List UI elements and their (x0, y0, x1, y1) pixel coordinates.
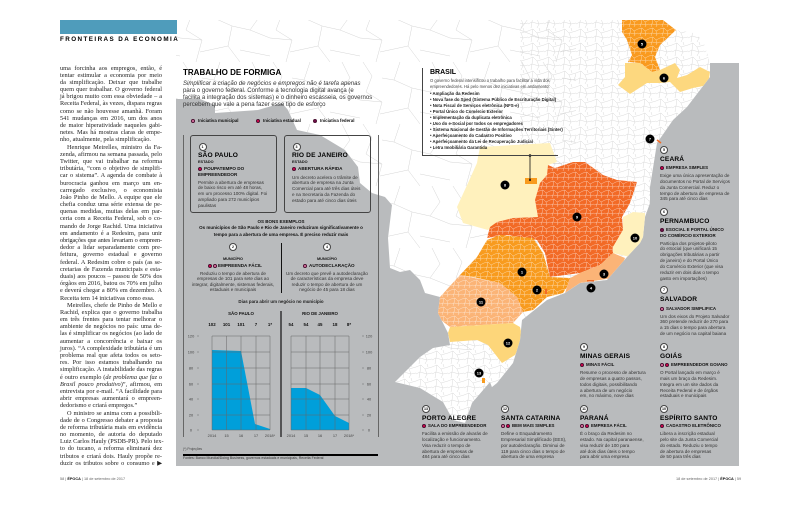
block: Porto Alegre: 484 para até cinco dias (422, 454, 470, 459)
block: Salvador: SALVADOR SIMPLIFICA (666, 306, 716, 311)
chart: days to open a business: 16 (318, 433, 322, 438)
panel frame lines (183, 135, 379, 437)
article text column: Rachid, explica que o governo trabalha (60, 309, 162, 316)
block: Espírito Santo: do estado. Reduziu o tempo (660, 443, 717, 448)
block: Goiás (660, 343, 728, 398)
block: Santa Catarina: abertura de uma empresa (501, 454, 554, 459)
block: Minas Gerais: de empresas a quatro passos, (580, 376, 642, 381)
article text column (60, 64, 164, 467)
intro text: para o governo federal. Conforme a tecnologia digital avança (e (183, 88, 354, 94)
article text column: zenda, afirmou na semana passada, pelo (60, 151, 162, 158)
map: Brazil with highlighted states: 1 (521, 270, 524, 274)
article text column: órgãos em 2016, batou os 70% em julho (60, 280, 162, 287)
chart: days to open a business: 100 (366, 350, 373, 354)
article text column: dedorismo e criará empregos.” (60, 402, 137, 409)
block: Minas Gerais: MINAS FÁCIL (586, 362, 614, 367)
chart: days to open a business: 40 (367, 396, 372, 402)
card: São Paulo: em um processo 100% digital. Foi (198, 191, 267, 196)
good examples heading: tempo para a abertura de uma empresa. É preciso reduzir mais (214, 232, 348, 237)
map: Brazil with highlighted states: 5 (641, 42, 644, 46)
article text column: é outro exemplo (de problema que faz o (60, 374, 162, 381)
chart: days to open a business: 2018* (344, 433, 355, 438)
article text column: de reforma tributária mais em evidência (60, 424, 162, 431)
chart: days to open a business: 16 (239, 433, 243, 438)
map: Brazil with highlighted states: 7 (649, 136, 652, 142)
block: Pernambuco: de janeiro) e do Portal Único (660, 258, 718, 263)
article text column: João Pinho de Mello. A equipe que ele (60, 194, 162, 201)
chart: days to open a business: 101 (223, 322, 231, 327)
article text column: obrigações que antes levariam o empreen- (60, 237, 162, 244)
article text column: problema real que afeta todos os seto- (60, 352, 162, 359)
block: Porto Alegre: localização e funcionamento. (422, 437, 481, 442)
example: Autodeclaração: MUNICÍPIO (317, 257, 337, 261)
article text column: já brigou muito com essa obviedade – a (60, 93, 162, 100)
legend: Iniciativa estadual (263, 118, 301, 123)
article text column: Brasil pouco produtivo)”, afirmou, em (60, 381, 162, 388)
block: Santa Catarina: SANTA CATARINA (501, 414, 560, 422)
card: São Paulo: ESTADO (198, 160, 214, 164)
article text column: ceria com a Receita Federal, sob o co- (60, 215, 162, 222)
lagoon (472, 382, 493, 405)
article text column: netes. Mas há mostras claras de empe- (60, 129, 162, 136)
block: Minas Gerais: a abertura de um negócio (580, 388, 632, 393)
chart: days to open a business: 60 (367, 382, 372, 386)
card: Rio de Janeiro: Um decreto acelera o trâmite de (292, 174, 358, 180)
article text column: em andamento é a Redesim, para unir (60, 230, 162, 237)
panel: Brasil: • Portal Único do Comércio Exterior (430, 109, 503, 114)
block: Minas Gerais: 9 (583, 345, 585, 349)
intro text: Simplificar a criação de negócios e empregos não é tarefa apenas (183, 80, 360, 86)
card: São Paulo: POUPATEMPO DO (204, 166, 244, 171)
article text column: dedor a lidar separadamente com pre- (60, 244, 162, 251)
chart: days to open a business: 54 (289, 322, 294, 327)
block: Goiás: estaduais e municipais (660, 393, 706, 398)
block: Pernambuco: reduzir em dois dias o tempo (660, 270, 719, 275)
article text column: carregado exclusivo, o economista (60, 187, 162, 194)
block: Porto Alegre: 13 (424, 407, 428, 411)
chart footer and sources: (*) Projeções (183, 447, 202, 451)
block: Paraná: É o braço da Redesim no (580, 431, 632, 436)
block: Ceará: 5 (663, 148, 665, 152)
title: TRABALHO DE FORMIGA (183, 68, 281, 77)
chart: days to open a business: 1* (268, 322, 272, 327)
example: Autodeclaração: 4 (326, 245, 328, 249)
chart: days to open a business: 102 (208, 322, 216, 327)
chart: days to open a business: 120 (366, 334, 373, 338)
card: Rio de Janeiro: RIO DE JANEIRO (292, 152, 348, 159)
example: Autodeclaração: negócio de 45 para 18 dias (299, 287, 355, 292)
example: Autodeclaração (286, 243, 368, 292)
block: Porto Alegre: PORTO ALEGRE (422, 414, 476, 422)
block: Salvador: a 15 dias o tempo para abertura (660, 325, 725, 330)
article text column: burocracia ganhou em março um en- (60, 180, 162, 186)
chart: days to open a business: 20 (189, 412, 194, 418)
block: Paraná: para abrir uma empresa (580, 454, 629, 459)
article text column: Meirelles, chefe de Pinho de Mello e (67, 302, 162, 309)
chart heading: Dias para abrir um negócio no município (238, 299, 324, 304)
block: Ceará: da Junta Comercial. Reduz o (660, 185, 719, 190)
chart footer and sources (183, 447, 378, 460)
intro text: percebem que vale a pena fazer esse tipo de esforço (183, 102, 326, 108)
map: Brazil with highlighted states: 8 (504, 182, 507, 188)
block: Espírito Santo: de abertura de empresas (660, 449, 711, 454)
panel: Brasil: • Letra Imobiliária Garantida (430, 145, 487, 150)
block: Paraná: estado. Na capital paranaense, (580, 437, 644, 442)
section header: FRONTEIRAS DA ECONOMIA (60, 36, 179, 43)
article text column: tributos e criará dois. Hauly propõe re- (60, 453, 162, 460)
block: Salvador: Um dos eixos do Projeto Salvador (660, 314, 729, 318)
block: Porto Alegre (422, 405, 488, 459)
block: Goiás: mais um braço da Redesim. (660, 376, 717, 381)
panel: Brasil: empreendedores. Há pelo menos dez iniciativas em andamento: (430, 84, 550, 89)
chart: days to open a business (188, 311, 373, 438)
article text column: e deverá chegar a 80% em dezembro. A (60, 287, 162, 294)
block: Pernambuco: PERNAMBUCO (660, 218, 710, 225)
article text column: entrevista por e-mail. “A facilidade para (60, 388, 162, 395)
block: Pernambuco: ESOCIAL E PORTAL ÚNICO (666, 227, 724, 232)
article text column: las é simplificar os negócios (ao lado de (60, 330, 162, 337)
article text column: como se não houvesse amanhã. Foram (60, 108, 162, 115)
map: Brazil with highlighted states: 12 (506, 340, 511, 346)
card: São Paulo: paulistas (198, 203, 216, 208)
card: Rio de Janeiro: 3 (296, 145, 298, 149)
panel: Brasil: O governo federal intensificou o trabalho para facilitar a vida dos (430, 78, 550, 83)
block: Porto Alegre: Facilita a emissão de alvarás de (422, 431, 488, 436)
block: Ceará: Exige uma única apresentação de (660, 173, 729, 178)
card: Rio de Janeiro: e na Secretaria da Fazenda do (292, 192, 355, 197)
block: Ceará: CEARÁ (660, 156, 684, 163)
chart: days to open a business: 15 (224, 433, 229, 438)
article text column: dade de o Congresso debater a proposta (60, 417, 162, 424)
panel: Brasil: BRASIL (430, 69, 456, 76)
block: Goiás: Receita Federal e de órgãos (660, 388, 718, 393)
article text column: 541 mudanças em 2016, um dos anos (60, 115, 162, 122)
page footer right: 18 de setembro de 2017 | ÉPOCA | 59 (676, 477, 741, 481)
article text column: de maior hiperatividade naqueles gabi- (60, 122, 162, 129)
example: Empreenda Fácil: MUNICÍPIO (223, 257, 243, 261)
intro text: facilita a integração dos sistemas) e o dinheiro escasseia, os governos (183, 95, 372, 101)
article text column: car o sistema”. A agenda de combate à (60, 172, 162, 179)
article text column: ambiente de negócios no país: uma de- (60, 323, 162, 330)
block: Porto Alegre: Visa reduzir o tempo de (422, 443, 470, 448)
example: Autodeclaração: reduzir o tempo de abertura de um (292, 282, 362, 286)
chart: days to open a business: SÃO PAULO (228, 311, 254, 316)
chart: days to open a business: 18 (333, 322, 338, 327)
block: Goiás: Integra em um site dados da (660, 382, 718, 387)
example: Autodeclaração: de características da empresa deve (291, 276, 363, 281)
block: Santa Catarina: por autodeclaração. Diminui de (501, 443, 565, 448)
block: Pernambuco: do Comércio Exterior (que visa (660, 264, 723, 269)
block: Espírito Santo (660, 405, 721, 459)
block: Santa Catarina: 12 (503, 407, 507, 411)
chart: days to open a business: 60 (189, 382, 194, 386)
card: Rio de Janeiro: ABERTURA RÁPIDA (298, 166, 342, 171)
panel: Brasil: • Sistema Nacional de Gestão de Informações Territoriais (Sinter) (430, 127, 563, 132)
article text column: federal. A Redesim cobre o país (as se- (60, 259, 162, 266)
map: Brazil with highlighted states: 11 (479, 300, 484, 304)
article text column: cretarias de Fazenda municipais e esta- (60, 266, 162, 273)
block: Porto Alegre: SALA DO EMPREENDEDOR (428, 423, 486, 428)
block: Pernambuco: Participa dos projetos-piloto (660, 240, 717, 246)
middle divider (280, 243, 282, 293)
good examples heading: OS BONS EXEMPLOS (257, 219, 304, 224)
card: São Paulo: Permite a abertura de empresas (198, 180, 264, 184)
chart: days to open a business: 8* (347, 322, 351, 327)
example: Empreenda Fácil (192, 243, 274, 292)
article text column: simplificação. A instabilidade das regras (60, 366, 162, 373)
block: Ceará: EMPRESA SIMPLES (666, 165, 708, 170)
map: Brazil with highlighted states (176, 20, 739, 466)
chart: days to open a business: 17 (254, 433, 258, 438)
chart footer and sources: Fontes: Banco Mundial/Doing Business, governos estaduais e municipais, Receita Federal (183, 456, 323, 460)
panel: Brasil (422, 68, 558, 156)
map: Brazil with highlighted states: 6 (663, 76, 666, 80)
card: Rio de Janeiro (284, 135, 371, 213)
block: Espírito Santo: 10 (662, 407, 666, 411)
article text column: res. Por isso estamos trabalhando na (60, 359, 162, 366)
card: São Paulo: 1 (202, 145, 204, 149)
article text column: quem quer trabalhar. O governo federal (60, 86, 162, 93)
block: Pernambuco: obrigações tributárias a partir (660, 252, 720, 257)
block: Porto Alegre: abertura de empresas de (422, 449, 473, 454)
example: Empreenda Fácil: Reduziu o tempo de abertura de (200, 270, 266, 276)
panel: Brasil: • Ampliação da Redesim (430, 90, 480, 96)
block: Goiás: 8 (663, 345, 665, 349)
block: Goiás: O Portal lançado em março é (660, 370, 720, 375)
article text column: uma forcinha aos empregos, então, é (60, 64, 162, 72)
block: Minas Gerais (580, 343, 646, 398)
block: Salvador (660, 286, 730, 336)
block: Pernambuco: DO COMÉRCIO EXTERIOR (660, 233, 716, 238)
example: Empreenda Fácil: empresas de 101 para sete dias ao (197, 276, 269, 281)
chart: days to open a business: 7 (255, 322, 258, 327)
chart: days to open a business: 120 (188, 334, 195, 338)
chart: days to open a business: 0 (190, 428, 193, 432)
block: Minas Gerais: todos digitais, possibilitando (580, 382, 637, 387)
block: Goiás: GOIÁS (660, 353, 682, 360)
map: Brazil with highlighted states: 3 (603, 272, 606, 276)
panel: Brasil: • Uso do e-Social por todos os empregadores (430, 121, 523, 126)
article text column: feitura, governo estadual e governo (60, 251, 162, 258)
block: Santa Catarina: 119 para cinco dias o tempo de (501, 449, 565, 454)
article text column: duzir os tributos sobre o consumo e ▶ (60, 460, 162, 467)
block: Paraná: até dois dias úteis o tempo (580, 449, 635, 454)
good examples heading: Os municípios de São Paulo e Rio de Janeiro reduziram significativamente o (199, 225, 363, 230)
article text column: mando de Jorge Rachid. Uma iniciativa (60, 223, 162, 230)
example: Empreenda Fácil: EMPREENDA FÁCIL (218, 263, 262, 268)
article text column: juros). “A complexidade tributária é um (60, 345, 162, 352)
article text column: O ministro se anima com a possibili- (67, 410, 162, 416)
card: São Paulo: SÃO PAULO (198, 152, 238, 159)
block: Paraná: 11 (582, 407, 586, 411)
card: Rio de Janeiro: Comercial para até três dias úteis (292, 186, 360, 191)
card: São Paulo: ampliado para 272 municípios (198, 197, 259, 202)
article text column: aumentar a concorrência e baixar os (60, 338, 162, 345)
block: Pernambuco: do eSocial (que unificará 15 (660, 246, 717, 251)
chart: days to open a business: RIO DE JANEIRO (302, 311, 339, 316)
map: Brazil with highlighted states: 4 (590, 286, 593, 290)
block: Salvador: SALVADOR (660, 296, 697, 303)
example: Empreenda Fácil: estaduais e municipais (210, 287, 256, 292)
chart: days to open a business: 40 (189, 396, 194, 402)
chart: days to open a business: 15 (304, 433, 308, 438)
article text column: Receita Federal, às vezes, dispara regras (60, 100, 162, 107)
article text column: tentar estimular a economia por meio (60, 72, 162, 79)
block: Pernambuco: gasto em importações) (660, 276, 707, 281)
article text column: da simplificação. Deixar que trabalhe (60, 79, 162, 86)
map: Brazil with highlighted states: 10 (633, 236, 638, 240)
chart: days to open a business: 101 (237, 322, 245, 327)
block: Santa Catarina: BEM MAIS SIMPLES (512, 423, 554, 428)
page footer left: 58 | ÉPOCA | 18 de setembro de 2017 (60, 477, 125, 481)
card: Rio de Janeiro: abertura de empresa na Junta (292, 180, 354, 185)
chart: days to open a business: 0 (368, 428, 371, 432)
chart: days to open a business: 20 (367, 412, 372, 418)
chart: days to open a business: 80 (189, 366, 194, 370)
block: Minas Gerais: em, no máximo, nove dias (580, 393, 634, 398)
legend: Iniciativa federal (320, 118, 354, 123)
article text column: em três frentes para tentar melhorar o (60, 316, 162, 323)
block: Paraná: EMPRESA FÁCIL (591, 423, 627, 428)
block: Santa Catarina: Empresarial Simplificado (EES), (501, 437, 566, 442)
panel: Brasil: • Nota Fiscal de Serviços eletrônica (NFS-e) (430, 103, 519, 108)
block: Ceará (660, 146, 730, 201)
article text column: abrir empresas aumentará o empreen- (60, 395, 162, 402)
panel: Brasil: • Aperfeiçoamento do Cadastro Positivo (430, 133, 512, 138)
card: São Paulo: EMPREENDEDOR (198, 172, 237, 176)
legend (191, 118, 354, 123)
chart: days to open a business: 45 (318, 322, 323, 327)
block: Espírito Santo: ESPÍRITO SANTO (660, 414, 718, 422)
section header (60, 20, 179, 43)
chart: days to open a business: 54 (304, 322, 309, 327)
map: Brazil with highlighted states: 13 (477, 370, 482, 376)
block: Pernambuco (660, 208, 724, 281)
panel: Brasil: • Aperfeiçoamento da Lei de Recuperação Judicial (430, 139, 533, 144)
block: Espírito Santo: CADASTRO ELETRÔNICO (666, 423, 721, 428)
block: Salvador: de um negócio na capital baiana (660, 331, 726, 336)
article text column: chefia conduz uma série extensa de pe- (60, 201, 162, 208)
block: Salvador: 360 pretende reduzir de 270 para (660, 319, 728, 324)
block: Minas Gerais: MINAS GERAIS (580, 353, 630, 360)
example: Empreenda Fácil: integrar, digitalmente, sistemas federais, (192, 282, 274, 286)
map: Brazil with highlighted states: 9 (576, 214, 579, 220)
chart: days to open a business: 2018* (265, 433, 276, 438)
legend: Iniciativa municipal (198, 118, 239, 123)
block: Espírito Santo: de 50 para três dias (660, 454, 701, 459)
example: Autodeclaração: AUTODECLARAÇÃO (309, 263, 355, 268)
map: Brazil with highlighted states: 2 (536, 288, 539, 292)
intro text (183, 80, 372, 108)
panel: Brasil: • Implementação da duplicata eletrônica (430, 115, 512, 120)
article text column: tributária, “com o objetivo de simplifi- (60, 165, 162, 172)
block: Pernambuco: 6 (663, 210, 665, 214)
card: Rio de Janeiro: estado para até cinco dias úteis (292, 198, 357, 203)
article text column: Twitter, que vai trabalhar na reforma (60, 158, 162, 165)
block: Espírito Santo: pelo site da Junta Comercial (660, 437, 718, 442)
block: Paraná: visa reduzir de 100 para (580, 443, 629, 448)
good examples heading (199, 219, 363, 237)
block: Goiás: EMPREENDEDOR GOIANO (671, 362, 728, 367)
chart: days to open a business: 17 (333, 433, 337, 438)
article text column: nho, atualmente, pela simplificação. (60, 136, 151, 143)
block: Santa Catarina (501, 405, 566, 459)
block: Minas Gerais: Resume o processo de abertura (580, 370, 646, 375)
block: Espírito Santo: Libera a inscrição estadual (660, 431, 715, 436)
chart: days to open a business: 2014 (208, 433, 217, 438)
block: Ceará: 345 para até cinco dias (660, 196, 708, 201)
block: Paraná: PARANÁ (580, 414, 609, 422)
block: Salvador: 7 (663, 288, 665, 292)
article text column: duais) aos poucos – passou de 50% dos (60, 273, 162, 280)
article text column: Henrique Meirelles, ministro da Fa- (67, 144, 162, 151)
card: São Paulo: de baixo risco em até 48 horas, (198, 185, 262, 190)
block: Santa Catarina: Define o Enquadramento (501, 431, 552, 436)
article text column: Luiz Carlos Hauly (PSDB-PR). Pelo tex- (60, 438, 164, 445)
card: Rio de Janeiro: ESTADO (292, 160, 308, 164)
example: Autodeclaração: Um decreto que prevê a autodeclaração (286, 270, 368, 276)
article text column: quenas medidas, muitas delas em par- (60, 208, 162, 215)
article text column: no momento, de autoria do deputado (60, 431, 162, 438)
chart: days to open a business: 100 (188, 350, 195, 354)
block: Ceará: documentos no Portal de Serviços (660, 179, 730, 184)
chart: days to open a business: 80 (367, 366, 372, 370)
block: Ceará: tempo de abertura de empresa de (660, 191, 729, 196)
example: Empreenda Fácil: 2 (232, 245, 234, 249)
article text column: Receita tem 14 iniciativas como essa. (60, 294, 154, 302)
panel: Brasil: • Nova fase do Sped (Sistema Público de Escrituração Digital) (430, 97, 556, 102)
chart: days to open a business: 2014 (287, 433, 296, 438)
block: Paraná (580, 405, 644, 459)
card: São Paulo (190, 135, 277, 213)
article text column: to do tucano, a reforma eliminará dez (60, 445, 162, 452)
